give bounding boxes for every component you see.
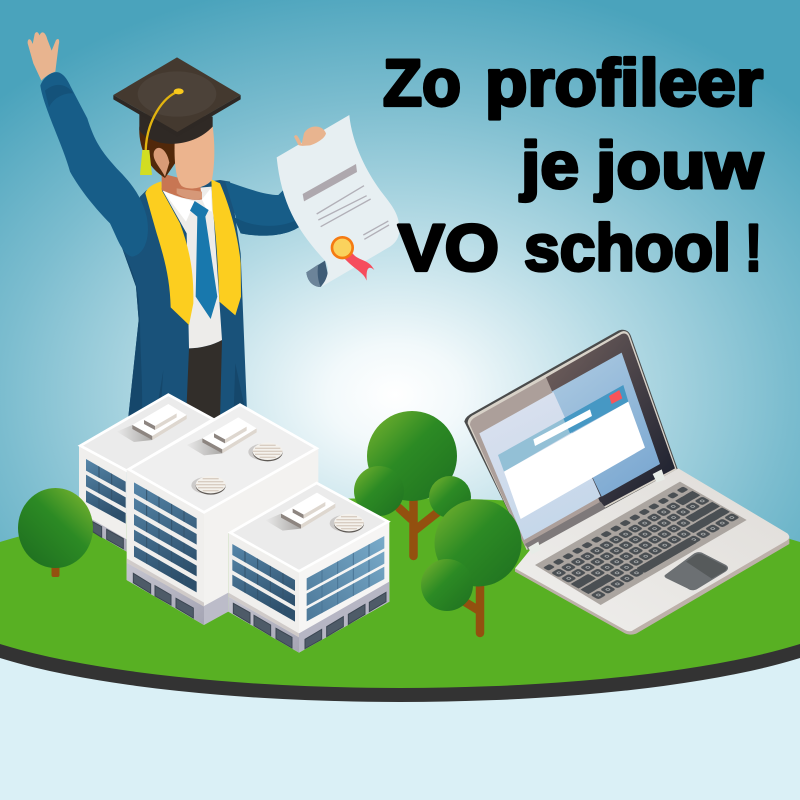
trees behind building <box>354 411 471 556</box>
middle front wall <box>127 468 204 625</box>
middle side wall <box>204 448 318 607</box>
tree left <box>18 488 93 577</box>
diploma text lines <box>317 186 389 239</box>
laptop base <box>515 468 789 631</box>
rear roof unit <box>117 404 187 442</box>
left sash <box>145 181 193 325</box>
island edge <box>0 512 800 702</box>
pale bottom band <box>0 600 800 800</box>
space bar <box>636 538 697 573</box>
island lawn <box>0 498 800 688</box>
hinges <box>528 469 665 554</box>
title line 3: ! <box>745 210 762 284</box>
title line 2: jouw <box>594 128 764 202</box>
mortarboard <box>113 57 241 132</box>
rear windows <box>86 459 126 524</box>
window header <box>498 419 570 472</box>
diploma sheet <box>277 115 399 287</box>
front right windows <box>307 536 384 621</box>
middle plinth band <box>127 558 204 607</box>
front plinth band <box>228 593 299 637</box>
seal <box>332 237 353 258</box>
laptop lid outer <box>464 330 678 550</box>
rear block <box>79 395 213 552</box>
front right plinth <box>299 582 389 653</box>
bezel left <box>470 374 607 547</box>
screen right <box>552 353 660 497</box>
middle roof unit <box>187 417 257 455</box>
middle basement windows <box>133 573 193 618</box>
letter rows <box>549 490 742 601</box>
board highlight <box>138 71 216 117</box>
trunk <box>399 500 438 556</box>
left crown <box>354 466 404 516</box>
title line 3: VO <box>398 210 499 284</box>
mortarboard edge <box>113 95 241 137</box>
front roof <box>230 483 388 571</box>
front basement windows <box>233 592 386 649</box>
address bar <box>533 409 592 446</box>
lid rim <box>468 331 677 550</box>
hand raised <box>28 32 59 81</box>
front roof unit <box>265 493 335 531</box>
right arm <box>225 181 302 236</box>
collar <box>163 188 212 222</box>
screen left <box>479 392 601 540</box>
diploma <box>277 115 399 287</box>
holding hand <box>294 126 326 146</box>
rear roof <box>80 395 213 471</box>
small crown <box>421 559 473 611</box>
trunk <box>465 580 480 633</box>
right crown <box>429 476 471 518</box>
right sash <box>211 179 241 315</box>
trackpad shade <box>686 554 727 579</box>
tree crown <box>367 411 457 501</box>
face <box>175 126 214 188</box>
vent 1 <box>248 443 283 461</box>
title line 1: Zo <box>383 46 461 120</box>
front right wall <box>299 522 389 653</box>
close button <box>609 390 622 404</box>
crown <box>18 488 93 568</box>
vent 2 <box>191 476 226 495</box>
title line 1: profileer <box>485 46 763 120</box>
front left windows <box>232 544 295 622</box>
tassel button <box>174 88 184 94</box>
bezel lower strip <box>525 502 608 550</box>
window body <box>504 402 645 519</box>
middle windows <box>134 482 197 592</box>
title line 3 <box>398 210 762 284</box>
front left plinth <box>228 597 299 653</box>
gown <box>122 180 247 420</box>
title line 3: school <box>524 210 731 284</box>
middle plinth <box>127 563 204 625</box>
diploma roll <box>306 261 328 287</box>
rear wall <box>79 446 127 552</box>
cap band <box>139 113 213 144</box>
bezel right <box>546 333 675 507</box>
grass island <box>0 498 800 702</box>
diploma heading bar <box>303 164 357 201</box>
title line 2: je <box>519 128 579 202</box>
wide keys <box>551 491 730 594</box>
trousers <box>186 340 222 420</box>
ear <box>154 148 169 177</box>
hair <box>139 127 176 178</box>
graduate <box>28 32 399 420</box>
function row <box>539 484 692 573</box>
tassel <box>140 150 152 175</box>
neck highlight <box>177 188 202 199</box>
school building <box>79 395 389 653</box>
main crown <box>434 500 522 586</box>
middle roof <box>129 405 317 512</box>
ribbon <box>343 253 374 281</box>
raised arm <box>40 72 148 257</box>
title <box>383 46 764 284</box>
title line 2 <box>519 128 764 202</box>
front block <box>228 483 389 653</box>
keys <box>539 484 742 601</box>
cuff shade <box>45 85 73 107</box>
vent 3 <box>330 514 364 533</box>
keyboard tray <box>535 482 747 605</box>
front left wall <box>228 533 299 653</box>
trunk <box>52 566 60 577</box>
tassel cord <box>146 91 179 151</box>
tie <box>190 201 217 319</box>
shirt <box>163 187 222 348</box>
title line 1 <box>383 46 763 120</box>
laptop <box>464 330 789 635</box>
rear basement windows <box>93 522 123 549</box>
middle block <box>127 405 318 625</box>
tree front <box>421 500 522 633</box>
right arm shade <box>233 217 302 236</box>
neck <box>162 173 202 200</box>
laptop base edge <box>515 537 789 635</box>
gown folds <box>122 247 247 420</box>
rear plinth <box>79 512 127 552</box>
trackpad <box>665 552 728 590</box>
